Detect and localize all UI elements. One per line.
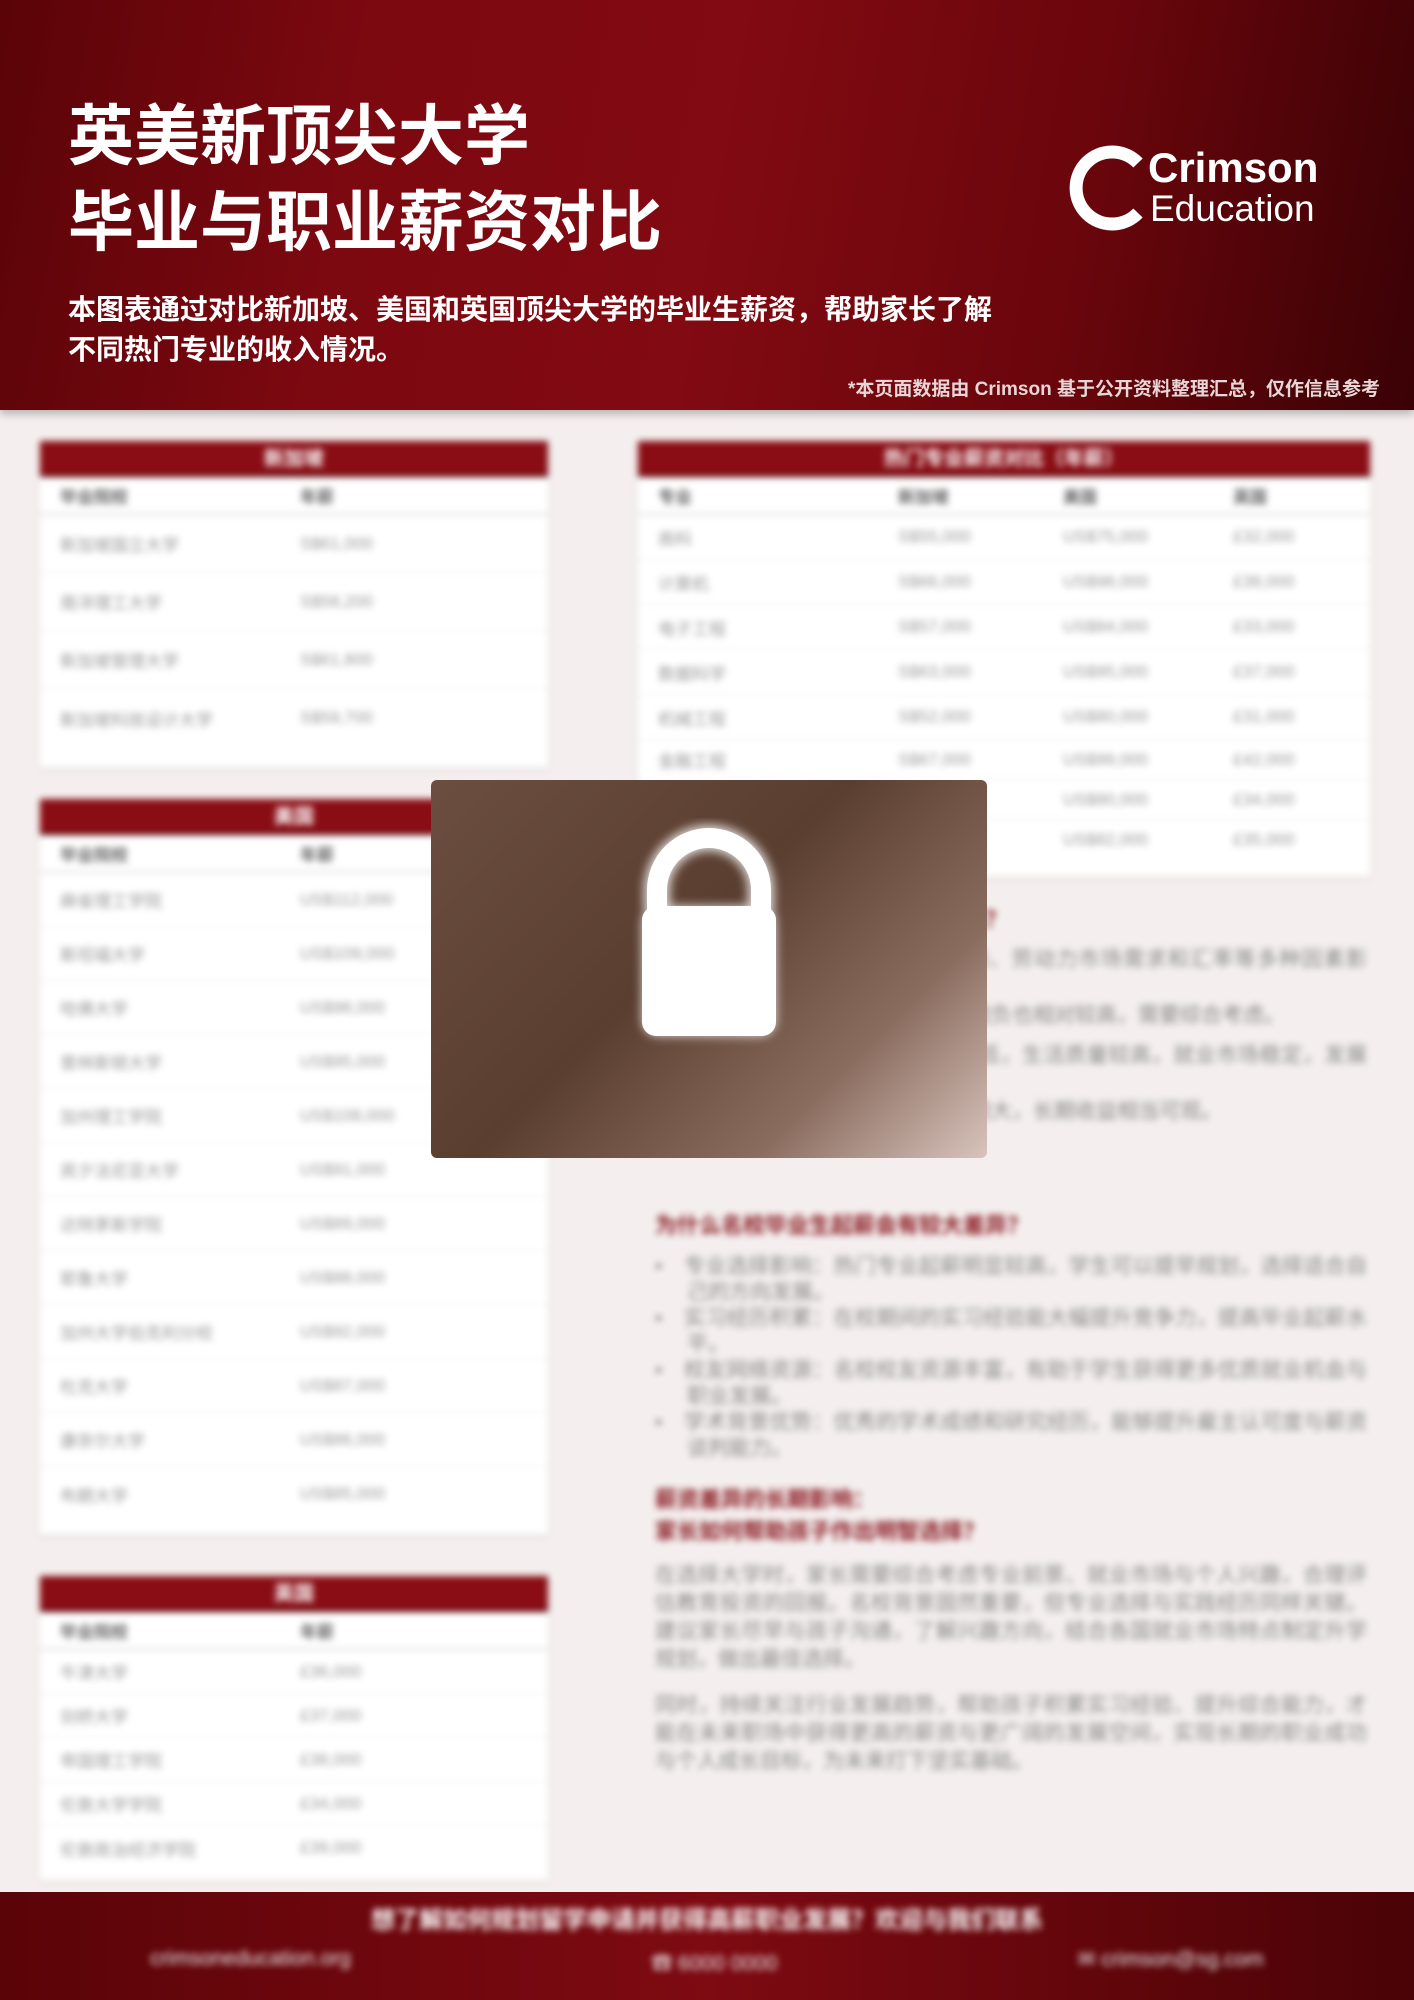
panel: Singapore: S$59,700 — [300, 708, 373, 727]
panel: majors table: 机械工程 — [658, 710, 726, 728]
panel: majors table: £37,000 — [1233, 662, 1294, 681]
text block: section 1: 英国薪资起点较低，但职业发展空间大，长期收益相当可观。 — [655, 1100, 1222, 1123]
panel: majors table: £42,000 — [1233, 750, 1294, 768]
panel: USA: 斯坦福大学 — [60, 946, 145, 965]
subtitle — [68, 294, 992, 365]
panel: USA: US$112,000 — [300, 890, 393, 908]
footer text — [146, 1902, 1268, 1975]
panel: UK: 伦敦政治经济学院 — [60, 1840, 196, 1860]
icon: padlock — [634, 818, 784, 1044]
panel: Singapore: 毕业院校 — [60, 488, 128, 506]
panel: majors table: £33,000 — [1233, 617, 1294, 636]
panel: majors table: S$57,000 — [898, 617, 971, 636]
panel: majors table: 法律 — [658, 832, 692, 852]
panel: UK: £38,000 — [300, 1750, 361, 1768]
panel: UK: 伦敦大学学院 — [60, 1796, 162, 1815]
footer text: crimsoneducation.org — [150, 1947, 351, 1970]
panel: Singapore: S$58,200 — [300, 592, 373, 610]
text block: section 3: 家长如何帮助孩子作出明智选择？ — [655, 1519, 985, 1544]
panel: UK: 帝国理工学院 — [60, 1752, 162, 1771]
panel: UK: 年薪 — [300, 1622, 334, 1642]
panel: USA: 耶鲁大学 — [60, 1270, 128, 1289]
panel: majors table: £35,000 — [1233, 830, 1294, 849]
panel: majors table — [638, 441, 1370, 876]
panel: majors table: £32,000 — [1233, 527, 1294, 546]
panel: USA: US$87,000 — [300, 1376, 385, 1394]
panel: UK: £36,000 — [300, 1662, 361, 1680]
panel: USA: US$108,000 — [300, 1106, 395, 1124]
panel: Singapore: 年薪 — [300, 488, 334, 506]
panel: majors table: S$63,000 — [898, 662, 971, 681]
panel: USA: 加州大学伯克利分校 — [60, 1324, 213, 1343]
panel: USA: 普林斯顿大学 — [60, 1054, 162, 1073]
footer text: 想了解如何规划留学申请并获得高薪职业发展？欢迎与我们联系 — [371, 1907, 1043, 1934]
text block: section 1: 美国薪资整体较高，但生活成本与税负也相对较高，需要综合考虑。 — [655, 1004, 1285, 1027]
panel: USA: 达特茅斯学院 — [60, 1216, 162, 1235]
text block: section 2 bullets — [652, 1209, 1368, 1460]
logo — [1070, 144, 1318, 230]
lock overlay — [431, 780, 987, 1158]
panel: majors table: 经济学 — [658, 792, 709, 811]
panel: UK: 剑桥大学 — [60, 1708, 128, 1727]
text block: section 2 bullets: • 学术背景优势：优秀的学术成绩和研究经历，能够提升雇主认可度与薪资谈判能力。 — [655, 1411, 1367, 1460]
text block: section 3: 在选择大学时，家长需要综合考虑专业前景、就业市场与个人兴趣，合理评估教育投资的回报。名校背景固然重要，但专业选择与实践经历同样关键。建议家长尽早与孩子沟通，了解兴趣方向，结合各国就业市场特点制定升学规划，做出最佳选择。 — [655, 1564, 1367, 1671]
panel: majors table: 商科 — [658, 530, 692, 548]
panel: majors table: US$84,000 — [1063, 617, 1148, 636]
panel: USA: 麻省理工学院 — [60, 892, 162, 911]
panel: majors table: 金融工程 — [658, 752, 726, 771]
text block: section 2 bullets: 为什么名校毕业生起薪会有较大差异？ — [655, 1213, 1029, 1238]
panel: UK: £34,000 — [300, 1794, 361, 1812]
title — [68, 99, 662, 259]
footer band — [0, 1892, 1414, 2000]
panel: USA: US$91,000 — [300, 1160, 385, 1178]
panel: majors table: US$95,000 — [1063, 662, 1148, 681]
panel: majors table: US$98,000 — [1063, 572, 1148, 591]
panel: UK: 牛津大学 — [60, 1664, 128, 1683]
text block: section 3: 薪资差异的长期影响： — [655, 1487, 875, 1512]
panel: Singapore: S$61,000 — [300, 534, 373, 552]
panel: majors table: US$99,000 — [1063, 750, 1148, 768]
panel: Singapore: 新加坡 — [264, 448, 324, 470]
source note: *本页面数据由 Crimson 基于公开资料整理汇总，仅作信息参考 — [848, 379, 1380, 400]
panel: USA: US$109,000 — [300, 944, 395, 962]
panel: majors table: £31,000 — [1233, 707, 1294, 726]
subtitle: 本图表通过对比新加坡、美国和英国顶尖大学的毕业生薪资，帮助家长了解 — [68, 294, 992, 325]
panel: majors table: S$60,000 — [898, 830, 971, 849]
panel: majors table: 热门专业薪资对比（年薪） — [884, 448, 1124, 470]
panel: USA: 杜克大学 — [60, 1378, 128, 1397]
panel: UK — [40, 1576, 548, 1880]
logo: Education — [1150, 188, 1315, 229]
text block: section 1: 薪资受到当地生活成本、行业结构、劳动力市场需求和汇率等多种因素影响，各国差异明显。 — [655, 948, 1367, 999]
text block: section 3 — [651, 1483, 1370, 1774]
panel: USA: 哈佛大学 — [60, 1000, 128, 1019]
logo: Crimson — [1148, 144, 1318, 191]
panel: Singapore: S$61,800 — [300, 650, 373, 668]
panel: USA: 毕业院校 — [60, 846, 128, 864]
panel: Singapore: 新加坡国立大学 — [60, 536, 179, 555]
panel: majors table: 专业 — [658, 488, 692, 506]
title: 毕业与职业薪资对比 — [68, 185, 662, 259]
panel: majors table: US$75,000 — [1063, 527, 1148, 546]
panel: majors table: 新加坡 — [898, 488, 949, 506]
panel: USA: 宾夕法尼亚大学 — [60, 1162, 179, 1181]
panel: majors table: 英国 — [1233, 488, 1267, 506]
panel: USA: US$85,000 — [300, 1484, 385, 1503]
panel: majors table: S$55,000 — [898, 527, 971, 546]
panel: UK: 毕业院校 — [60, 1622, 128, 1642]
panel: majors table: S$52,000 — [898, 707, 971, 726]
panel: majors table: US$80,000 — [1063, 707, 1148, 726]
text block: section 2 bullets: • 实习经历积累：在校期间的实习经验能大幅提升竞争力，提高毕业起薪水平。 — [655, 1307, 1367, 1356]
panel: USA: US$95,000 — [300, 1052, 385, 1070]
panel: USA: 美国 — [274, 806, 314, 828]
panel: USA: US$86,000 — [300, 1430, 385, 1448]
panel: majors table: US$80,000 — [1063, 790, 1148, 808]
title: 英美新顶尖大学 — [68, 99, 530, 173]
panel: majors table: £38,000 — [1233, 572, 1294, 591]
header banner — [0, 0, 1414, 410]
panel: Singapore: 新加坡科技设计大学 — [60, 710, 213, 730]
panel: USA: 布朗大学 — [60, 1486, 128, 1506]
panel: USA: 康奈尔大学 — [60, 1432, 145, 1451]
panel: Singapore: 南洋理工大学 — [60, 594, 162, 613]
panel: majors table: 数据科学 — [658, 664, 726, 684]
panel: majors table: 美国 — [1063, 488, 1097, 506]
text block: section 3: 同时，持续关注行业发展趋势，帮助孩子积累实习经验、提升综合能力，才能在未来职场中获得更高的薪资与更广阔的发展空间，实现长期的职业成功与个人成长目标，为未来打下坚实基础。 — [655, 1694, 1367, 1773]
panel: majors table: S$67,000 — [898, 750, 971, 768]
text block: section 1: 新加坡薪资处于中等水平，税率较低，生活质量较高，就业市场稳定，发展前景良好。 — [655, 1044, 1367, 1095]
text block: section 2 bullets: • 校友网络资源：名校校友资源丰富，有助于学生获得更多优质就业机会与职业发展。 — [655, 1359, 1367, 1408]
panel: UK: £39,000 — [300, 1838, 361, 1857]
footer text: ☎ 6000 0000 — [651, 1952, 777, 1975]
panel: majors table: S$56,000 — [898, 790, 971, 808]
text block: section 1 — [655, 905, 1369, 1124]
panel: UK: £37,000 — [300, 1706, 361, 1724]
panel: majors table: S$66,000 — [898, 572, 971, 591]
panel: USA: US$89,000 — [300, 1214, 385, 1232]
footer text: ✉ crimson@sg.com — [1078, 1948, 1264, 1971]
panel: Singapore: 新加坡管理大学 — [60, 652, 179, 671]
panel: USA — [40, 799, 548, 1534]
text block: section 1: 为什么不同国家薪资差异如此明显？ — [655, 907, 1007, 932]
panel: USA: US$88,000 — [300, 1268, 385, 1286]
subtitle: 不同热门专业的收入情况。 — [68, 334, 404, 365]
panel: majors table: US$82,000 — [1063, 830, 1148, 849]
panel: majors table: 电子工程 — [658, 620, 726, 638]
panel: USA: 年薪 — [300, 846, 334, 864]
panel: USA: US$92,000 — [300, 1322, 385, 1340]
panel: USA: 加州理工学院 — [60, 1108, 162, 1127]
text block: section 2 bullets: • 专业选择影响：热门专业起薪明显较高，学生可以提早规划，选择适合自己的方向发展。 — [655, 1255, 1367, 1304]
panel: USA: US$98,000 — [300, 998, 385, 1016]
panel: UK: 英国 — [274, 1583, 314, 1605]
panel: Singapore — [40, 441, 548, 767]
panel: majors table: £34,000 — [1233, 790, 1294, 808]
panel: majors table: 计算机 — [658, 574, 709, 594]
